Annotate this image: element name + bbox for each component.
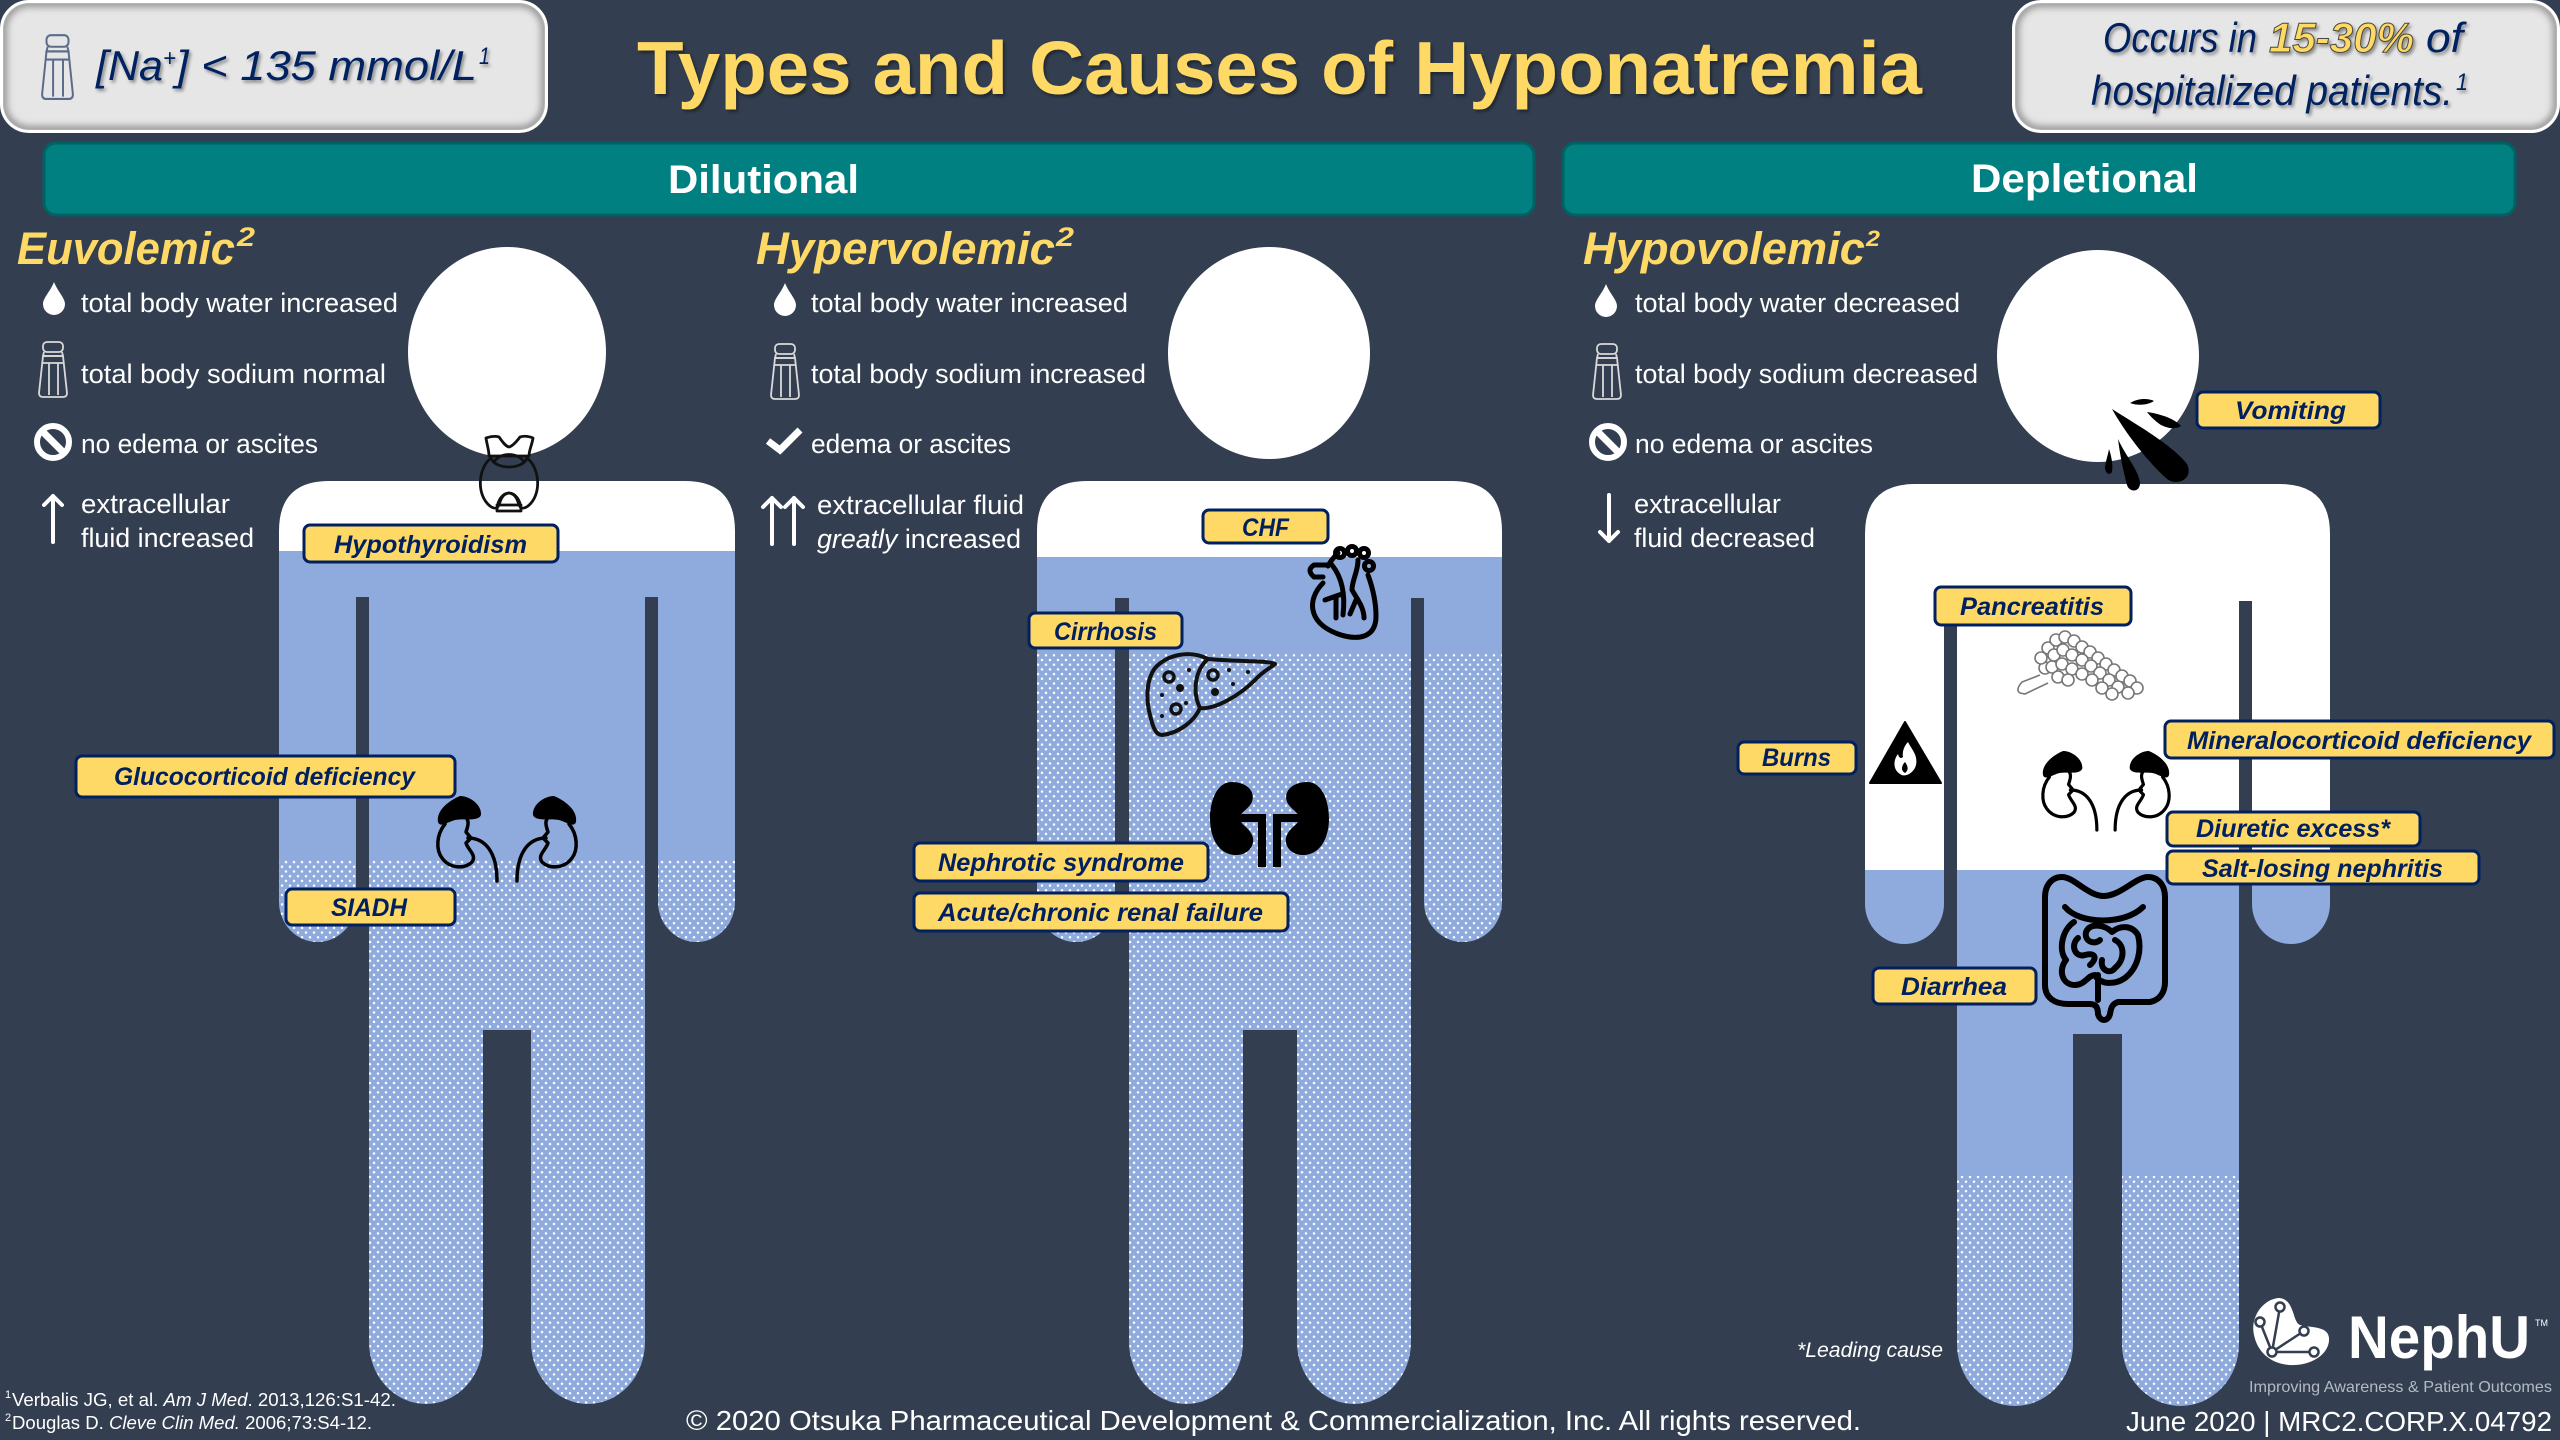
label: vomiting: Vomiting (2235, 397, 2346, 425)
icon: solid kidneys (1210, 782, 1329, 867)
logo: NephU: TM (2535, 1318, 2548, 1328)
text: total body water: total body water increased (811, 288, 1128, 318)
copyright: © 2020 Otsuka Pharmaceutical Development & Commercialization, Inc. All rights reserved. (686, 1405, 1861, 1436)
header bar: depletional (1563, 143, 2515, 215)
label: nephrotic syndrome: Nephrotic syndrome (938, 849, 1184, 877)
prevalence text: hospitalized patients. (2091, 67, 2453, 114)
figure: body with fluid levels (1860, 475, 2340, 1416)
label: diuretic excess: Diuretic excess* (2196, 815, 2391, 843)
text: edema: edema or ascites (811, 429, 1011, 459)
sodium threshold box (2, 2, 546, 131)
text: extracellular fluid: fluid decreased (1634, 523, 1815, 553)
icon: salt shaker (1593, 344, 1621, 399)
icon: salt shaker (42, 35, 73, 99)
icon: burn warning triangle (1870, 722, 1941, 783)
icon: kidneys with adrenal glands (2043, 751, 2169, 830)
icon: down arrow (1600, 495, 1618, 541)
text: extracellular fluid: extracellular (81, 489, 230, 519)
label: SIADH: SIADH (331, 894, 408, 922)
icon: double up arrow (763, 498, 803, 544)
references: 2 (5, 1412, 11, 1424)
label: mineralocorticoid deficiency (2165, 721, 2554, 758)
icon: up arrow (44, 496, 62, 542)
sodium threshold text: 1 (479, 43, 490, 70)
label: burns: Burns (1762, 744, 1831, 772)
logo: NephU: Improving Awareness & Patient Outcomes (2249, 1379, 2552, 1396)
icon: water drop (43, 282, 65, 315)
icon: water drop (1595, 284, 1617, 317)
prevalence text: 15-30% (2269, 14, 2414, 61)
references (5, 1389, 396, 1433)
sodium threshold text: [Na (95, 42, 163, 89)
text: total body sodium: total body sodium normal (81, 359, 386, 389)
label: CHF (1203, 510, 1328, 543)
document code: June 2020 | MRC2.CORP.X.04792 (2126, 1406, 2552, 1437)
text: extracellular fluid (81, 489, 254, 553)
text: edema: no edema or ascites (81, 429, 318, 459)
prevalence text (2091, 14, 2468, 114)
heading: hypervolemic: Hypervolemic (756, 223, 1055, 274)
logo: NephU (2249, 1298, 2552, 1396)
text: extracellular fluid: extracellular (1634, 489, 1781, 519)
text: total body sodium: total body sodium decreased (1635, 359, 1978, 389)
text: total body water: total body water decreased (1635, 288, 1960, 318)
figure: head (1168, 247, 1370, 459)
text: extracellular fluid: extracellular fluid (817, 490, 1024, 520)
text: extracellular fluid: fluid increased (81, 523, 254, 553)
figure: body with fluid levels (1030, 470, 1510, 1422)
panel: euvolemic (17, 222, 750, 1419)
label: pancreatitis (1935, 587, 2131, 625)
header bar: dilutional (44, 143, 1534, 215)
icon: vomit splash (2105, 399, 2189, 490)
label: hypothyroidism (304, 525, 558, 562)
label: diarrhea: Diarrhea (1901, 973, 2007, 1001)
logo: NephU: NephU (2348, 1304, 2530, 1371)
icon: kidney network (2253, 1298, 2329, 1365)
text: extracellular fluid: greatly increased (817, 524, 1021, 554)
label: pancreatitis: Pancreatitis (1960, 593, 2104, 621)
text: total body sodium: total body sodium increased (811, 359, 1146, 389)
prevalence text: of (2426, 14, 2468, 61)
icon: pancreas (2018, 631, 2143, 700)
heading: euvolemic: Euvolemic (17, 223, 235, 274)
label: burns (1738, 742, 1856, 774)
figure: head (408, 247, 606, 457)
icon: kidneys with adrenal glands (438, 796, 576, 881)
label: mineralocorticoid deficiency: Mineralocorticoid deficiency (2187, 727, 2532, 755)
icon: intestines (2045, 877, 2165, 1020)
heading: euvolemic: 2 (236, 222, 255, 252)
icon: check mark (768, 430, 800, 450)
icon: no symbol (37, 426, 69, 458)
label: diarrhea (1873, 968, 2036, 1004)
panel: hypovolemic (1583, 223, 2554, 1416)
footnote: leading cause: *Leading cause (1797, 1339, 1943, 1362)
heading: hypovolemic: Hypovolemic (1583, 223, 1865, 274)
label: acute/chronic renal failure: Acute/chronic renal failure (937, 899, 1263, 927)
icon: salt shaker (771, 344, 799, 399)
label: acute/chronic renal failure (914, 893, 1288, 931)
label: cirrhosis: Cirrhosis (1054, 618, 1157, 646)
icon: thyroid (480, 436, 538, 511)
references: Verbalis JG, et al. Am J Med. 2013,126:S1-42. (12, 1390, 396, 1410)
header bar: dilutional: Dilutional (668, 158, 859, 202)
label: salt-losing nephritis (2167, 851, 2479, 884)
references: 1 (5, 1389, 11, 1401)
icon: heart (1310, 546, 1376, 637)
header bar: depletional: Depletional (1971, 157, 2198, 201)
label: glucocorticoid deficiency (76, 756, 455, 797)
icon: cirrhotic liver (1147, 654, 1275, 735)
prevalence text: 1 (2456, 69, 2468, 96)
label: SIADH (286, 889, 455, 925)
label: salt-losing nephritis: Salt-losing nephritis (2202, 855, 2443, 883)
label: vomiting (2197, 392, 2380, 428)
label: cirrhosis (1029, 613, 1182, 648)
sodium threshold text: ] < 135 mmol/L (172, 42, 477, 89)
heading: hypovolemic: 2 (1865, 226, 1881, 251)
label: diuretic excess (2167, 812, 2420, 846)
sodium threshold text: + (163, 45, 176, 72)
text: total body water: total body water increased (81, 288, 398, 318)
label: hypothyroidism: Hypothyroidism (334, 531, 527, 559)
title: Types and Causes of Hyponatremia (637, 26, 1923, 110)
figure: body with fluid levels (270, 470, 750, 1419)
icon: water drop (774, 283, 796, 316)
heading: hypervolemic: 2 (1055, 222, 1074, 252)
figure: head (1997, 250, 2199, 462)
prevalence text: Occurs in (2103, 14, 2257, 61)
label: CHF: CHF (1242, 514, 1290, 542)
icon: no symbol (1592, 426, 1624, 458)
label: nephrotic syndrome (914, 843, 1208, 881)
text: extracellular fluid (1634, 489, 1815, 553)
text: extracellular fluid (817, 490, 1024, 554)
prevalence box (2014, 2, 2558, 131)
text: edema: no edema or ascites (1635, 429, 1873, 459)
references: Douglas D. Cleve Clin Med. 2006;73:S4-12. (12, 1413, 372, 1433)
icon: salt shaker (39, 342, 67, 397)
panel: hypervolemic (756, 222, 1510, 1422)
label: glucocorticoid deficiency: Glucocorticoid deficiency (114, 763, 416, 791)
